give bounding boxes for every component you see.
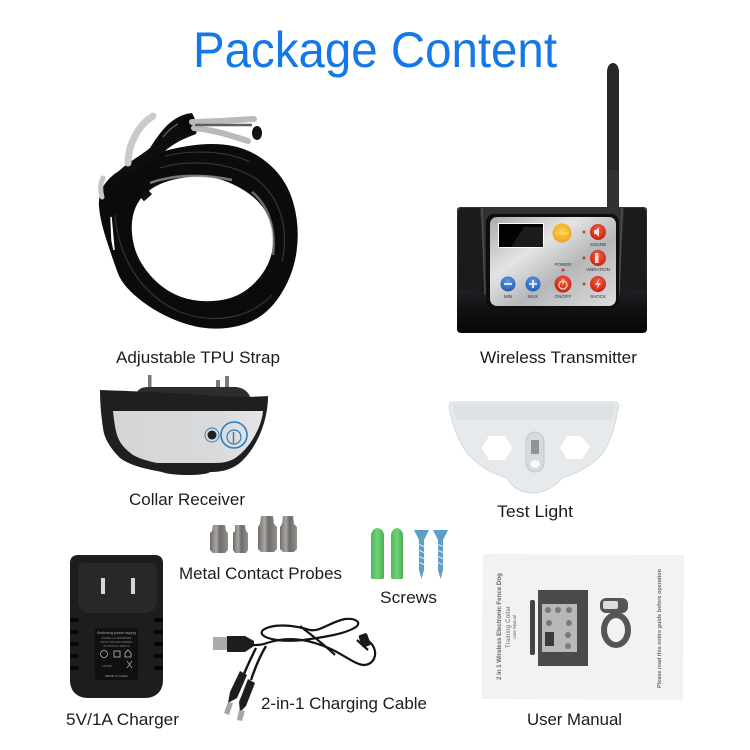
indicator light [205, 428, 219, 442]
label: charger: 5V/1A Charger [66, 711, 180, 729]
manual sheet [481, 554, 684, 700]
antenna [607, 63, 619, 207]
on/off button: ON/OFF [554, 294, 572, 299]
manual title text: 2 in 1 Wireless Electronic Fence Dog [496, 573, 503, 680]
probe 2 [233, 525, 248, 553]
hexagon hole left [482, 436, 512, 460]
label: transmitter: Wireless Transmitter [480, 349, 638, 367]
charger label: Switching power supply [97, 631, 136, 635]
collar body [100, 390, 268, 475]
charger label: MODEL:AA-050100SPA [101, 636, 132, 640]
item: metal contact probes [210, 516, 297, 553]
label: strap: Adjustable TPU Strap [116, 349, 280, 367]
wall anchor 1 [371, 528, 384, 579]
charger body [70, 555, 163, 698]
label: screws: Screws [380, 589, 437, 607]
item: wireless transmitter [457, 63, 647, 333]
title: Package Content [193, 22, 557, 78]
transmitter body [457, 207, 647, 333]
manual title text: Training Collar [506, 606, 512, 648]
mode button: MODE [555, 231, 569, 236]
test light housing [449, 402, 618, 493]
min button: MIN [504, 294, 512, 299]
hexagon hole right [560, 436, 590, 459]
collar panel [113, 411, 263, 463]
manual footer text: Please read this entire guide before operation [657, 568, 663, 688]
USB plug [213, 636, 254, 652]
item: test light [449, 402, 618, 493]
screw 1 [414, 530, 429, 579]
shock button: SHOCK [590, 294, 606, 299]
max button: MAX [528, 294, 538, 299]
strap end loop [112, 113, 197, 190]
power indicator: POWER [554, 262, 572, 267]
shock button [582, 276, 606, 299]
cable loops [253, 619, 375, 665]
power indicator [554, 262, 572, 272]
item: user manual [481, 554, 684, 700]
mode button [552, 224, 572, 242]
control panel [490, 217, 616, 306]
probe 1 [210, 525, 228, 553]
item: charger [70, 555, 163, 698]
item: collar receiver [100, 375, 268, 475]
display [498, 223, 544, 248]
charger label: INPUT:100-240V 50/60Hz [100, 640, 133, 644]
label: test light: Test Light [497, 503, 573, 521]
LED [526, 432, 544, 472]
barrel plugs [228, 671, 247, 703]
label: manual: User Manual [527, 711, 622, 729]
screw 2 [433, 530, 448, 579]
item: adjustable TPU strap [99, 113, 298, 329]
charger face plate [78, 563, 157, 613]
probes on collar [148, 375, 229, 393]
max button [526, 276, 540, 299]
sound button: SOUND [590, 242, 607, 247]
label: probes: Metal Contact Probes [179, 565, 342, 583]
probe 4 [280, 516, 297, 552]
strap coil [99, 144, 298, 329]
sound button [582, 224, 607, 247]
vibration button [582, 250, 610, 272]
charger side grooves [72, 620, 161, 668]
prongs [101, 578, 135, 594]
charger label: MADE IN CHINA [105, 674, 128, 678]
vibration button: VIBRATION [586, 267, 610, 272]
charger label [95, 628, 138, 680]
on/off button [554, 276, 572, 299]
manual transmitter image [530, 590, 588, 666]
manual title text: User Manual [512, 615, 517, 639]
charger label: OUTPUT:5V 1000mA [103, 644, 130, 648]
label: collar receiver: Collar Receiver [129, 491, 246, 509]
power icon [221, 422, 247, 448]
strap metal ring [128, 116, 153, 163]
item: charging cable [213, 619, 375, 721]
wall anchor 2 [391, 528, 403, 579]
strap buckle [192, 119, 254, 141]
min button [500, 276, 516, 299]
probe 3 [258, 516, 277, 552]
charger label: LISTED [102, 664, 112, 668]
manual collar image [600, 598, 628, 645]
item: screws and anchors [371, 528, 448, 579]
label: cable: 2-in-1 Charging Cable [261, 695, 427, 713]
manual title text [496, 573, 517, 680]
